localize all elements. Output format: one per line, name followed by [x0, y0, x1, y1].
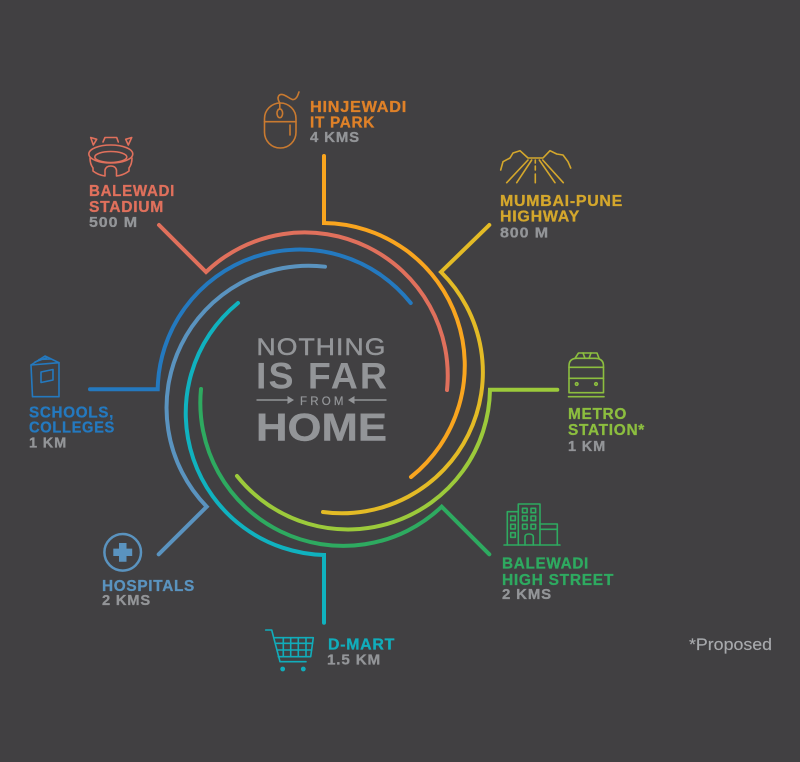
connector and arc: high street	[200, 389, 489, 554]
label: metro: METRO	[568, 406, 627, 423]
footnote: *Proposed	[689, 636, 772, 654]
connector and arc: D-Mart	[186, 303, 324, 623]
icon: highway and mountains	[501, 151, 571, 183]
label: stadium	[89, 183, 175, 231]
label: D-Mart: 1.5 KM	[327, 652, 381, 668]
icon: computer mouse	[264, 92, 299, 148]
icon: train	[568, 353, 604, 397]
label: IT park	[310, 99, 407, 146]
label: highway: HIGHWAY	[500, 209, 580, 226]
icon: book	[31, 356, 59, 397]
connector and arc: stadium	[159, 225, 448, 390]
connector and arc: IT park	[324, 156, 465, 477]
label: metro	[568, 406, 645, 455]
title: IS FAR	[256, 354, 387, 396]
label: stadium: STADIUM	[89, 199, 164, 216]
title: NOTHING	[256, 334, 386, 361]
icon: stadium	[89, 138, 133, 176]
label: hospitals	[102, 578, 195, 609]
panel: Metro Station	[237, 353, 645, 529]
panel: Schools, Colleges	[29, 250, 411, 451]
icon: medical cross	[104, 534, 141, 571]
icon: shopping cart	[266, 630, 313, 671]
label: schools: 1 KM	[29, 435, 67, 451]
label: IT park: 4 KMS	[310, 130, 360, 146]
title: HOME	[256, 407, 387, 450]
label: D-Mart	[327, 636, 395, 668]
label: metro: STATION*	[568, 422, 645, 439]
connector and arc: hospitals	[159, 266, 325, 554]
label: highway	[500, 193, 623, 241]
label: D-Mart: D-MART	[328, 636, 395, 653]
label: metro: 1 KM	[568, 439, 606, 455]
connector and arc: metro	[237, 390, 557, 529]
title	[256, 334, 387, 450]
label: stadium: 500 M	[89, 215, 138, 231]
label: high street: HIGH STREET	[502, 572, 614, 589]
label: IT park: HINJEWADI	[310, 99, 407, 116]
label: schools: SCHOOLS,	[29, 404, 114, 421]
label: highway: MUMBAI-PUNE	[500, 193, 623, 210]
panel: Hospitals	[102, 266, 325, 609]
panel: Balewadi Stadium	[89, 138, 448, 390]
label: hospitals: HOSPITALS	[102, 578, 195, 595]
panel: Hinjewadi IT Park	[264, 92, 465, 477]
panel: Balewadi High Street	[200, 389, 614, 603]
label: schools	[29, 404, 115, 451]
label: high street: BALEWADI	[502, 556, 589, 572]
label: stadium: BALEWADI	[89, 183, 175, 200]
panel: Mumbai-Pune Highway	[323, 151, 623, 513]
icon: buildings	[504, 504, 560, 545]
label: high street	[502, 556, 614, 603]
label: high street: 2 KMS	[502, 587, 552, 603]
title: FROM	[300, 396, 344, 408]
label: IT park: IT PARK	[310, 114, 375, 132]
label: highway: 800 M	[500, 225, 549, 241]
label: hospitals: 2 KMS	[102, 593, 151, 609]
connector and arc: schools	[90, 250, 411, 389]
label: schools: COLLEGES	[29, 420, 115, 437]
connector and arc: highway	[323, 225, 489, 513]
panel: D-Mart	[186, 303, 395, 671]
